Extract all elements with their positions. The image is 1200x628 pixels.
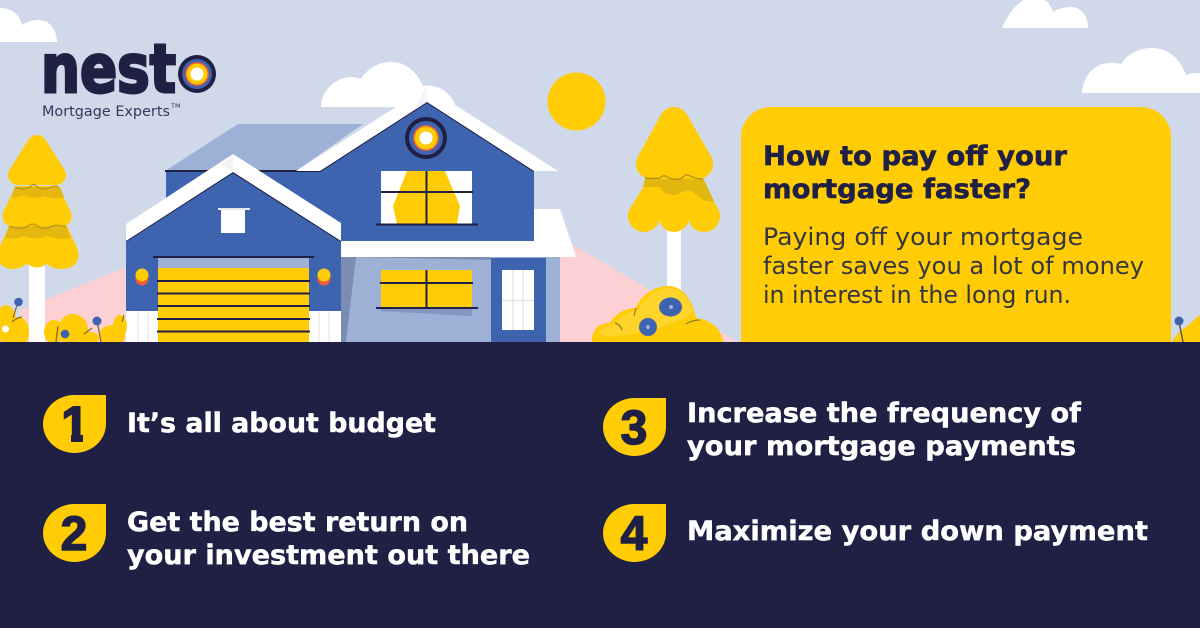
- back roof: [165, 124, 363, 171]
- tip 3: 3: [621, 402, 647, 455]
- tree: left: [0, 145, 79, 342]
- upper storey wall: [166, 102, 534, 245]
- tip 1: It’s all about budget: [127, 408, 436, 439]
- tip 4: Maximize your down payment: [687, 516, 1148, 547]
- card body text: in interest in the long run.: [763, 281, 1071, 309]
- card body text: [763, 223, 1144, 309]
- tip 1: [43, 395, 436, 453]
- logo: TM: [170, 102, 181, 110]
- lower window: [376, 270, 478, 308]
- garage roof trim: [126, 154, 341, 241]
- garage lamps: [136, 268, 330, 286]
- panel: tips: [0, 342, 1200, 628]
- upper window: [376, 171, 478, 224]
- logo ring: [178, 55, 216, 93]
- upper roof trim: [296, 87, 558, 171]
- tip 2: your investment out there: [127, 540, 530, 571]
- panel: intro card: [741, 107, 1171, 342]
- logo: nest: [41, 30, 176, 108]
- house: [126, 87, 576, 342]
- tip 4: [603, 504, 1148, 562]
- tip 2: [43, 504, 530, 571]
- tip 3: Increase the frequency of: [687, 398, 1081, 429]
- logo: Mortgage Experts: [42, 104, 170, 120]
- clouds: [0, 0, 1200, 107]
- bushes: left: [0, 298, 127, 347]
- tip 2: Get the best return on: [127, 507, 468, 538]
- pink hills: [20, 234, 738, 342]
- bush: right: [592, 286, 723, 342]
- awning: [341, 209, 576, 257]
- lower wall: [341, 257, 560, 342]
- tip 1: 1: [61, 398, 89, 452]
- tip 3: your mortgage payments: [687, 431, 1076, 462]
- tip 2: 2: [61, 508, 87, 561]
- tree: right: [628, 122, 720, 300]
- card body text: Paying off your mortgage: [763, 223, 1083, 251]
- tip 4: 4: [621, 508, 648, 561]
- garage door: [153, 257, 314, 342]
- card heading: How to pay off your: [763, 141, 1068, 172]
- roof target ornament: [405, 117, 447, 159]
- garage base: [126, 311, 341, 342]
- card heading: [763, 141, 1068, 205]
- card heading: mortgage faster?: [763, 174, 1031, 205]
- tip 3: [603, 398, 1081, 462]
- front door: [491, 258, 546, 342]
- card body text: faster saves you a lot of money: [763, 252, 1144, 280]
- garage wall: [126, 172, 341, 342]
- bush: far right: [1172, 315, 1200, 342]
- sun: [548, 72, 606, 130]
- garage vent: [218, 208, 250, 233]
